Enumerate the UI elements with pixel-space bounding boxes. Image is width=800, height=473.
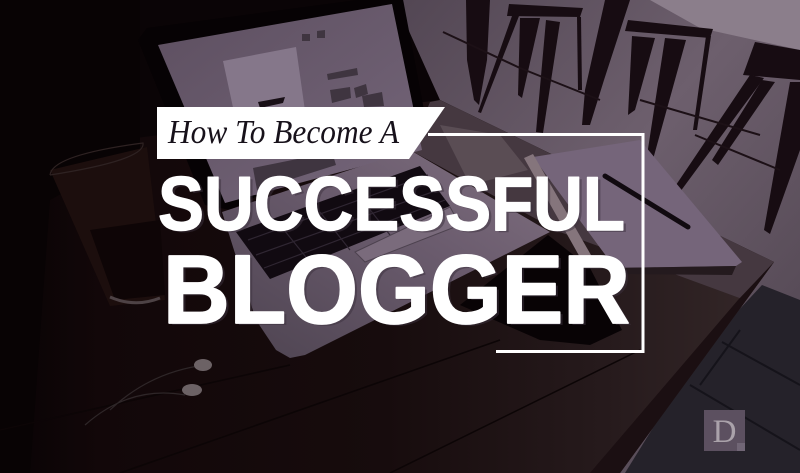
laptop screen xyxy=(158,4,422,203)
papers on table xyxy=(440,125,528,185)
title: blogger: BLOGGER xyxy=(166,237,633,346)
earbuds xyxy=(85,359,212,425)
title: successful: SUCCESSFUL xyxy=(158,162,625,247)
pen xyxy=(605,176,688,227)
laptop lid xyxy=(138,0,424,210)
keyboard xyxy=(236,166,450,279)
logo badge: D xyxy=(713,414,736,450)
ribbon heading: How To Become A xyxy=(167,114,399,151)
ribbon heading xyxy=(157,107,445,159)
title: successful: SUCCESSFUL xyxy=(161,164,628,249)
stools xyxy=(443,0,800,234)
glass of coffee xyxy=(50,143,165,306)
screen photo xyxy=(223,47,307,140)
notebook xyxy=(524,140,742,275)
title: blogger: BLOGGER xyxy=(163,235,630,344)
floor xyxy=(395,0,800,473)
phone and laptop shadow xyxy=(460,235,622,345)
screen sidebar xyxy=(253,30,384,190)
pencil xyxy=(524,154,595,268)
logo badge xyxy=(704,410,745,451)
trackpad xyxy=(355,207,460,262)
laptop xyxy=(138,0,550,358)
laptop base xyxy=(222,150,550,358)
title frame xyxy=(428,134,643,352)
